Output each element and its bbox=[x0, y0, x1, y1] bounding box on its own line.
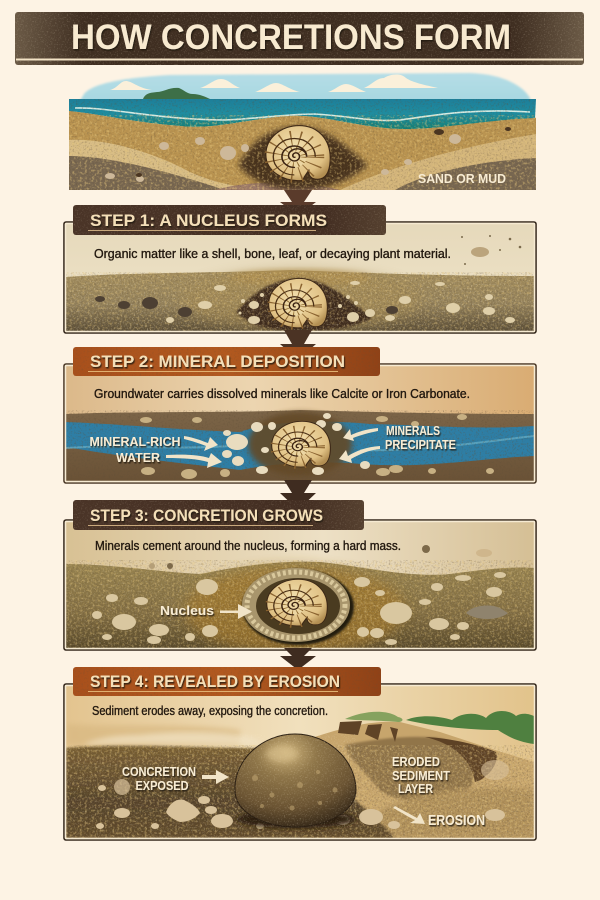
frame bbox=[64, 520, 536, 650]
title text: HOW CONCRETIONS FORM bbox=[71, 18, 511, 57]
concretion sphere bbox=[235, 734, 356, 828]
arrow: concretion pointer bbox=[202, 770, 229, 784]
arrows: mineral precipitation bbox=[339, 428, 380, 463]
arrow: step 2 to step 3 bbox=[280, 480, 316, 510]
arrow: scene to step 1 bbox=[280, 190, 316, 216]
label: sand or mud: SAND OR MUD bbox=[418, 171, 506, 186]
label: minerals precipitate: PRECIPITATE bbox=[385, 437, 456, 452]
title banner bbox=[15, 12, 584, 65]
ammonite fossil bbox=[272, 421, 330, 467]
sky with clouds bbox=[78, 73, 530, 104]
frame bbox=[64, 222, 536, 333]
step heading tag: STEP 3: CONCRETION GROWS bbox=[90, 506, 323, 525]
ammonite fossil bbox=[269, 278, 327, 328]
label: concretion exposed: CONCRETION bbox=[122, 764, 196, 779]
label: minerals precipitate: MINERALS bbox=[386, 423, 440, 438]
water bbox=[69, 99, 536, 129]
label: mineral-rich water bbox=[90, 434, 180, 465]
panel: ocean and seabed scene bbox=[69, 73, 536, 190]
step heading tag: STEP 4: REVEALED BY EROSION bbox=[90, 672, 340, 691]
step heading tag: STEP 2: MINERAL DEPOSITION bbox=[90, 352, 345, 371]
label: eroded sediment layer: SEDIMENT bbox=[392, 768, 450, 783]
grass and bushes bbox=[345, 711, 534, 744]
step heading tag bbox=[73, 347, 380, 376]
panel: step 1 bbox=[64, 205, 536, 333]
step heading tag bbox=[73, 500, 364, 530]
label: minerals precipitate bbox=[385, 423, 456, 452]
frame bbox=[64, 684, 536, 840]
body text: Organic matter like a shell, bone, leaf, or decaying plant material. bbox=[94, 246, 451, 261]
body text: Groundwater carries dissolved minerals like Calcite or Iron Carbonate. bbox=[94, 386, 470, 401]
label: eroded sediment layer: LAYER bbox=[398, 781, 433, 796]
arrow: step 1 to step 2 bbox=[280, 330, 316, 360]
island bbox=[143, 88, 210, 99]
step heading tag bbox=[73, 205, 386, 235]
panel: step 3 bbox=[64, 500, 536, 654]
concretion shell bbox=[242, 568, 354, 645]
ammonite fossil bbox=[266, 126, 330, 181]
arrow: nucleus pointer bbox=[220, 604, 252, 619]
step heading tag bbox=[73, 667, 381, 696]
arrow: step 3 to step 4 bbox=[280, 648, 316, 670]
arrow: erosion pointer bbox=[393, 806, 425, 824]
sediment layers bbox=[69, 99, 536, 190]
panel: step 2 bbox=[64, 347, 536, 483]
label: mineral-rich water: MINERAL-RICH bbox=[90, 434, 180, 449]
label: erosion: EROSION bbox=[428, 812, 485, 829]
label: mineral-rich water: WATER bbox=[116, 450, 161, 465]
body text: Minerals cement around the nucleus, forming a hard mass. bbox=[95, 538, 401, 553]
frame bbox=[64, 364, 536, 483]
ammonite fossil bbox=[267, 579, 327, 626]
label: concretion exposed: EXPOSED bbox=[136, 778, 188, 793]
label: nucleus: Nucleus bbox=[160, 603, 214, 618]
panel: step 4 bbox=[64, 667, 536, 840]
step heading tag: STEP 1: A NUCLEUS FORMS bbox=[90, 211, 327, 230]
body text: Sediment erodes away, exposing the concretion. bbox=[92, 703, 328, 718]
label: eroded sediment layer bbox=[392, 754, 450, 796]
arrows: water flow bbox=[166, 436, 222, 468]
label: eroded sediment layer: ERODED bbox=[392, 754, 440, 769]
label: concretion exposed bbox=[122, 764, 196, 793]
